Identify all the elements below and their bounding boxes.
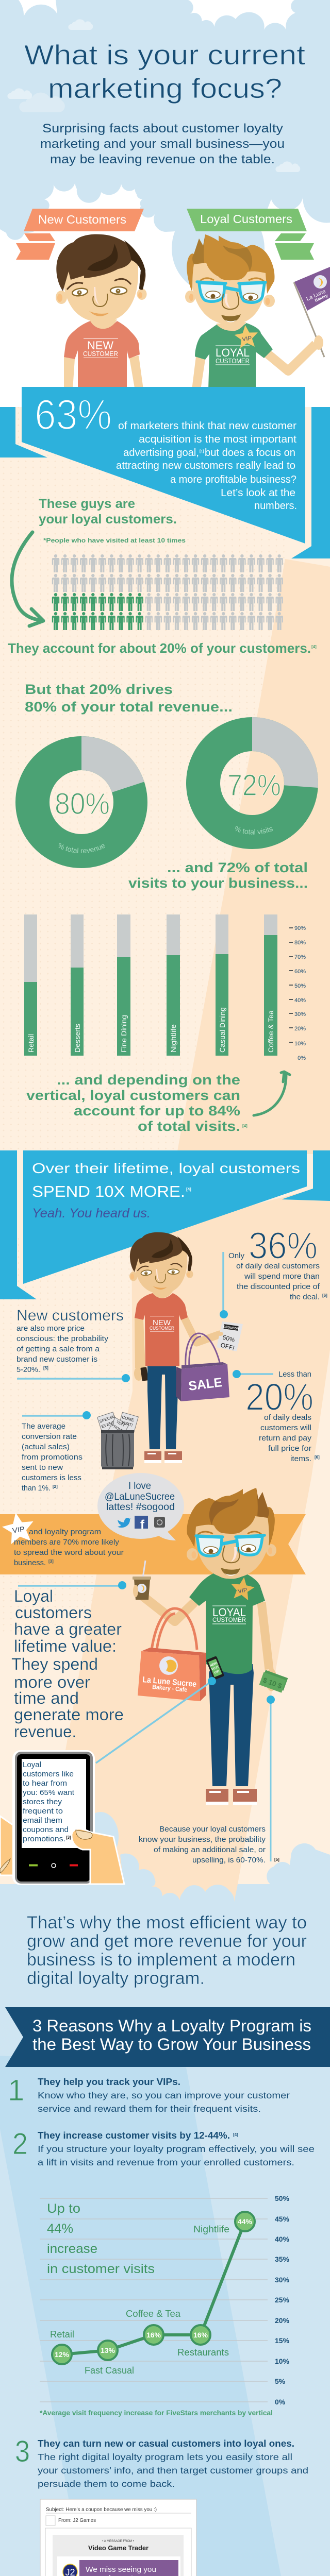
bar chart: loyal visits by vertical: 90% (294, 925, 306, 931)
panel: 63% of marketers: [1] (200, 450, 204, 453)
panel: 63% of marketers: but does a focus on (205, 447, 295, 459)
stat: 20%: of daily deals (264, 1413, 311, 1422)
character: new customer with sale bag: CUSTOMER (150, 1326, 174, 1331)
line chart: visit increase by vertical: 44% (238, 2217, 253, 2226)
panel: spend 10x more: SPEND 10X MORE. (32, 1182, 185, 1200)
character: new customer with sale bag: NEW (153, 1318, 171, 1327)
statement: up to 84% of visits (26, 1072, 248, 1134)
text: new customers price conscious: conscious: the probability (16, 1334, 109, 1343)
subtitle (40, 122, 285, 166)
statement: most efficient way to grow: business is to implement a modern (27, 1950, 295, 1970)
donut chart: 72% total visits: 72% (227, 769, 281, 802)
line chart: visit increase by vertical: 50% (275, 2194, 290, 2202)
character: loyal customer with flag: Bakery (314, 293, 329, 303)
icon: trash can with promotions (97, 1412, 138, 1469)
speech bubble: social post: I love (128, 1481, 151, 1492)
bar chart: loyal visits by vertical: 60% (294, 969, 306, 975)
email example: Video Game Trader (88, 2544, 148, 2552)
banner: 3 reasons (5, 2007, 330, 2067)
bar chart: loyal visits by vertical: 10% (294, 1041, 306, 1047)
ribbon: new customers: New Customers (38, 213, 126, 226)
phone in hand with stat: Loyal (23, 1761, 41, 1769)
text: new customers price conscious: are also more price (16, 1324, 85, 1333)
arrow: curved green up (254, 1072, 290, 1115)
reason 1: service and reward them for their frequent visits. (38, 2104, 261, 2114)
character: loyal customer with cup and bag (133, 1488, 276, 1805)
phone in hand with stat: email them (23, 1817, 62, 1825)
character: new customer with sale bag (129, 1232, 229, 1463)
text: loyal customers greater lifetime value: Loyal (14, 1587, 53, 1605)
note: people who visited: *People who have visited at least 10 times (43, 537, 186, 544)
speech bubble: social post: @LaLuneSucree (105, 1492, 175, 1502)
heading: 80% of revenue: 80% of your total revenue... (25, 699, 233, 715)
reason 3: persuade them to come back. (38, 2479, 175, 2489)
title (24, 40, 305, 104)
chart footnote: *Average visit frequency increase for FiveStars merchants by vertical (40, 2409, 273, 2417)
email example (40, 2499, 196, 2576)
panel: 63% of marketers: Let’s look at the (221, 487, 295, 499)
text: upselling probability: of making an additional sale, or (154, 1845, 266, 1854)
blue ribbon band behind stat 63% (0, 407, 330, 558)
icon: facebook (135, 1516, 148, 1532)
connector: conversion rate (22, 1411, 91, 1419)
text: upselling probability (139, 1825, 279, 1865)
stat: 36% (228, 1225, 327, 1301)
text: upselling probability: know your business, the probability (139, 1835, 266, 1844)
reason 1: They help you track your VIPs. (38, 2077, 180, 2087)
text: conversion rate: from promotions (22, 1453, 82, 1462)
bottom cloud background (0, 1812, 330, 2576)
donut chart: 72% total visits: % total visits (235, 826, 273, 835)
text: conversion rate: The average (22, 1422, 65, 1431)
statement: 20% of customers: [4] (311, 645, 317, 649)
bar chart: loyal visits by vertical: Nightlife (169, 1024, 177, 1053)
stat: 36%: will spend more than (244, 1272, 320, 1281)
stat: 36%: of daily deal customers (236, 1262, 320, 1270)
reason 1: 1 (8, 2074, 24, 2107)
stat: 20%: 20% (245, 1376, 314, 1418)
bar chart: loyal visits by vertical: 40% (294, 997, 306, 1004)
reason 3: your customers’ info, and then target customer groups and (38, 2465, 308, 2476)
panel: spend 10x more: Over their lifetime, loyal customers (32, 1160, 300, 1176)
text: loyal customers greater lifetime value: more over (14, 1673, 90, 1691)
subtitle: marketing and your small business—you (40, 137, 285, 151)
bar chart: loyal visits by vertical: Casual Dining (218, 1007, 226, 1053)
stat: 20%: return and pay (259, 1434, 312, 1443)
heading: these guys are your loyal customers: your loyal customers. (39, 512, 177, 527)
text: loyal customers greater lifetime value: lifetime value: (14, 1637, 117, 1655)
darker blue background stripe (0, 2056, 299, 2576)
stat: 36%: the discounted price of (237, 1282, 320, 1291)
line chart: visit increase by vertical: Restaurants (177, 2347, 229, 2358)
bar chart: loyal visits by vertical: 50% (294, 983, 306, 989)
line chart: visit increase by vertical: 5% (275, 2377, 286, 2385)
ribbon: new customers (16, 209, 144, 260)
stat: 36%: the deal. (290, 1293, 320, 1301)
line chart: visit increase by vertical: 10% (275, 2357, 290, 2365)
badge and text: vip members: VIP (12, 1524, 25, 1535)
text: conversion rate: (actual sales) (22, 1443, 70, 1451)
stat: 36%: 36% (249, 1225, 318, 1267)
stat: 20%: [6] (315, 1455, 320, 1460)
banner: 3 reasons: 3 Reasons Why a Loyalty Program is (32, 2016, 311, 2035)
reason 1: Know who they are, so you can improve your customer (38, 2090, 290, 2100)
stat: 20%: customers will (260, 1423, 311, 1432)
text: upselling probability: upselling, is 60-70%. (192, 1856, 266, 1865)
connector: phone to pocket (96, 1677, 216, 1763)
icon: phone in pocket: VISIT (211, 1666, 220, 1671)
panel: 63% of marketers: of marketers think that new customer (118, 420, 296, 432)
character: loyal customer with flag: La Lune (305, 289, 327, 302)
text: loyal customers greater lifetime value (11, 1587, 124, 1741)
icon: facebook: f (140, 1518, 145, 1532)
text: upselling probability: [5] (274, 1857, 279, 1862)
reason 2 (12, 2127, 315, 2167)
bar chart: loyal visits by vertical: 80% (294, 940, 306, 946)
icon: trash can with promotions: COME (121, 1415, 135, 1423)
text: conversion rate: than 1%. (22, 1484, 51, 1493)
pictogram: 100 customers (52, 554, 283, 630)
statement: up to 84% of visits: of total visits. (138, 1118, 240, 1134)
text: new customers price conscious: of getting a sale from a (16, 1345, 100, 1353)
bar chart: loyal visits by vertical: Retail (27, 1034, 35, 1053)
reason 3: They can turn new or casual customers into loyal ones. (38, 2438, 294, 2449)
text: conversion rate: conversion rate (22, 1432, 77, 1441)
icon: trash can with promotions: PROMO (111, 1424, 125, 1434)
reason 2: If you structure your loyalty program effectively, you will see (38, 2144, 315, 2154)
phone in hand with stat: customers like (23, 1770, 74, 1778)
text: conversion rate (22, 1422, 82, 1493)
statement: most efficient way to grow: digital loyalty program. (27, 1969, 205, 1988)
icon: coupon 50% off: OFF! (220, 1341, 235, 1352)
reason 1 (8, 2074, 290, 2114)
reason 3 (15, 2435, 308, 2489)
character: loyal customer with cup and bag: LOYAL (212, 1606, 246, 1619)
bag: la lune sucree: La Lune Sucree (142, 1675, 197, 1689)
logo: j2 games (63, 2564, 77, 2576)
speech bubble: social post: lattes! #sogood (106, 1502, 175, 1513)
text: new customers price conscious: New customers (16, 1307, 124, 1324)
line chart: visit increase by vertical: 15% (275, 2336, 290, 2345)
phone in hand with stat (0, 1750, 124, 1885)
statement: up to 84% of visits: ... and depending on the (57, 1072, 240, 1088)
connector: loyal customers (18, 1581, 126, 1589)
line chart: visit increase by vertical: Retail (50, 2329, 74, 2340)
panel: 63% of marketers: 63% (35, 391, 112, 438)
badge and text: vip members: and loyalty program (29, 1528, 101, 1536)
line chart: visit increase by vertical: 16% (193, 2331, 208, 2339)
line chart: visit increase by vertical: 16% (146, 2331, 161, 2339)
text: loyal customers greater lifetime value: They spend (11, 1655, 98, 1673)
text: new customers price conscious: brand new customer is (16, 1355, 97, 1364)
panel: spend 10x more (23, 1150, 307, 1284)
purple message panel (79, 2560, 178, 2576)
statement: 72% of visits: visits to your business... (128, 875, 308, 891)
donut chart: 80% total revenue: 80% (55, 787, 110, 821)
email example: From: J2 Games (58, 2518, 96, 2523)
line chart: visit increase by vertical: 35% (275, 2255, 290, 2263)
panel: spend 10x more: Yeah. You heard us. (32, 1206, 151, 1221)
character: loyal customer with cup and bag: CUSTOMER (212, 1616, 246, 1623)
panel: 63% of marketers: a more profitable business? (170, 474, 296, 485)
reason 2: a lift in visits and revenue from your enrolled customers. (38, 2157, 294, 2167)
stat: 20%: Less than (278, 1370, 311, 1379)
character: new customer with sale bag: SALE (188, 1375, 223, 1394)
icon: phone in pocket: NEW! (209, 1662, 218, 1668)
panel: spend 10x more: [4] (186, 1187, 191, 1192)
statement: most efficient way to grow: That’s why the most efficient way to (27, 1913, 307, 1933)
line chart: visit increase by vertical: Nightlife (193, 2224, 229, 2234)
icon: money (258, 1665, 290, 1697)
bag: la lune sucree (138, 1608, 206, 1701)
line chart: visit increase by vertical: Up to (47, 2201, 80, 2216)
line chart: visit increase by vertical: Coffee & Tea (126, 2309, 181, 2319)
character: new customer (56, 234, 146, 397)
donut chart: 80% total revenue: % total revenue (59, 843, 105, 853)
badge and text: vip members: business. (14, 1558, 46, 1567)
statement: most efficient way to grow: grow and get more revenue for your (27, 1931, 307, 1951)
phone in hand with stat: promotions. (23, 1835, 65, 1843)
text: loyal customers greater lifetime value: time and (14, 1689, 79, 1707)
subtitle: Surprising facts about customer loyalty (42, 122, 283, 135)
statement: 72% of visits: ... and 72% of total (167, 860, 308, 875)
panel: 63% of marketers (22, 387, 305, 544)
icon: twitter bird (118, 1518, 130, 1528)
text: upselling probability: Because your loyal customers (159, 1825, 266, 1834)
stat: 20%: items. (290, 1454, 311, 1463)
icon: instagram (154, 1517, 165, 1528)
icon: coupon 50% off (217, 1321, 243, 1352)
ribbon: vip word of mouth (0, 1514, 306, 1574)
heading: 80% of revenue: But that 20% drives (25, 682, 173, 697)
badge and text: vip members: to spread the word about your (14, 1548, 124, 1557)
heading: these guys are your loyal customers (39, 497, 177, 527)
statement: up to 84% of visits: vertical, loyal customers can (26, 1088, 240, 1103)
reason 2: 2 (12, 2127, 28, 2161)
panel: 63% of marketers: acquisition is the most important (139, 434, 296, 445)
character: new customer: CUSTOMER (83, 350, 118, 358)
line chart: visit increase by vertical: 30% (275, 2276, 290, 2284)
text: loyal customers greater lifetime value: have a greater (14, 1620, 122, 1638)
bar chart: loyal visits by vertical: Desserts (73, 1024, 81, 1053)
title: What is your current (24, 40, 305, 71)
donut chart: 80% total revenue (15, 736, 147, 868)
speech bubble: social post (97, 1473, 184, 1540)
text: new customers price conscious (16, 1307, 124, 1374)
bar chart: loyal visits by vertical: 0% (298, 1055, 306, 1061)
small decorative clouds (7, 19, 300, 172)
character: loyal customer with flag (185, 234, 330, 390)
subtitle: may be leaving revenue on the table. (50, 152, 275, 166)
text: loyal customers greater lifetime value: revenue. (14, 1722, 76, 1741)
icon: phone in pocket: US! (214, 1670, 220, 1675)
line chart: visit increase by vertical: in customer visits (47, 2262, 155, 2276)
reason 3: 3 (15, 2435, 30, 2468)
icon: trash can with promotions: VISIT! (121, 1420, 133, 1428)
statement: 20% of customers: They account for about 20% of your customers. (8, 640, 311, 656)
statement: 72% of visits (128, 860, 308, 891)
bar chart: loyal visits by vertical: Fine Dining (120, 1015, 128, 1053)
icon: money: $ 10 $ (262, 1676, 283, 1690)
line chart: visit increase by vertical: 20% (275, 2316, 290, 2325)
text: conversion rate: customers is less (22, 1473, 81, 1482)
badge and text: vip members: members are 70% more likely (14, 1538, 120, 1547)
bar chart: loyal visits by vertical: 70% (294, 954, 306, 960)
connector: new customers (17, 1374, 130, 1382)
blue ribbon band behind spend 10x (0, 1150, 330, 1299)
text: new customers price conscious: [5] (43, 1366, 48, 1370)
dotted pattern areas (0, 407, 289, 1633)
statement: most efficient way to grow (27, 1913, 307, 1988)
connector: 36% (220, 1252, 228, 1318)
icon: trash can with promotions: SPECIAL (99, 1414, 117, 1424)
ribbon: loyal customers (187, 209, 314, 260)
bar chart: loyal visits by vertical: Coffee & Tea (267, 1010, 275, 1053)
statement: up to 84% of visits: [4] (242, 1124, 248, 1128)
panel: 63% of marketers: advertising goal, (123, 447, 199, 459)
icon: trash can with promotions: EVENT (101, 1420, 116, 1429)
statement: up to 84% of visits: account for up to 84% (74, 1103, 240, 1118)
line chart: visit increase by vertical: 0% (275, 2398, 286, 2406)
icon: coffee cup (133, 1561, 193, 1621)
heading: 80% of revenue (25, 682, 233, 715)
text: conversion rate: sent to new (22, 1463, 63, 1472)
connector: upselling (267, 1696, 275, 1861)
email example: Subject: Here's a coupon because we miss you :) (46, 2507, 157, 2513)
bar chart: loyal visits by vertical: 20% (294, 1026, 306, 1032)
connector: 20% (233, 1370, 273, 1378)
arrow: curved green down (12, 532, 43, 626)
line chart: visit increase by vertical: 13% (101, 2346, 116, 2354)
reason 2: [4] (233, 2132, 238, 2137)
bar chart: loyal visits by vertical: 30% (294, 1011, 306, 1018)
phone in hand with stat: [3] (66, 1835, 71, 1840)
line chart: visit increase by vertical: 40% (275, 2235, 290, 2243)
panel: 63% of marketers: attracting new customers really lead to (116, 460, 295, 471)
reason 3: The right digital loyalty program lets you easily store all (38, 2452, 292, 2462)
phone in hand with stat: coupons and (23, 1826, 69, 1834)
ribbon: loyal customers: Loyal Customers (200, 212, 292, 226)
panel: 63% of marketers: numbers. (254, 500, 297, 512)
line chart: visit increase by vertical: 45% (275, 2215, 290, 2223)
email example: • A MESSAGE FROM • (102, 2540, 134, 2543)
reason 2: They increase customer visits by 12-44%. (38, 2130, 230, 2141)
character: new customer: NEW (87, 339, 113, 352)
icon: coupon 50% off: 50% (222, 1333, 236, 1344)
line chart: visit increase by vertical: Fast Casual (85, 2365, 134, 2376)
icon: phone in pocket (206, 1656, 224, 1680)
heading: these guys are your loyal customers: These guys are (39, 497, 135, 511)
stat: 36%: Only (228, 1251, 245, 1260)
title: marketing focus? (48, 73, 282, 104)
text: new customers price conscious: 5-20%. (16, 1365, 40, 1374)
line chart: visit increase by vertical (40, 2194, 290, 2406)
text: loyal customers greater lifetime value: generate more (14, 1705, 124, 1724)
stat: 20% (245, 1370, 320, 1463)
badge and text: vip members: [3] (48, 1559, 54, 1564)
icon: trash can with promotions: TEXT (116, 1420, 126, 1428)
character: loyal customer with cup and bag: VIP (238, 1587, 248, 1595)
phone in hand with stat: frequent to (23, 1807, 63, 1816)
icon: coupon 50% off: GROUPON (223, 1326, 239, 1331)
stat: 36%: [6] (322, 1293, 327, 1298)
character: loyal customer with flag: LOYAL (216, 346, 250, 359)
character: loyal customer with flag: CUSTOMER (216, 357, 250, 365)
badge and text: vip members (0, 1510, 124, 1567)
cream section background (0, 407, 330, 1901)
banner: 3 reasons: the Best Way to Grow Your Business (32, 2035, 311, 2054)
peach background shape lower (21, 1185, 330, 1906)
donut chart: 72% total visits (186, 717, 318, 849)
bar chart: loyal visits by vertical (24, 914, 306, 1061)
purple message panel: We miss seeing you (86, 2565, 156, 2574)
phone in hand with stat: you: 65% want (23, 1789, 74, 1797)
line chart: visit increase by vertical: 25% (275, 2296, 290, 2304)
line chart: visit increase by vertical: 44% (47, 2222, 73, 2236)
bag: la lune sucree: Bakery - Cafe (152, 1683, 188, 1693)
character: loyal customer with flag: VIP (242, 335, 252, 343)
peach background shape upper (177, 559, 330, 1154)
line chart: visit increase by vertical: 12% (55, 2350, 70, 2359)
phone in hand with stat: to hear from (23, 1780, 67, 1788)
line chart: visit increase by vertical: increase (47, 2242, 97, 2256)
stat: 20%: full price for (268, 1444, 311, 1453)
header cloud background (0, 0, 330, 295)
text: conversion rate: [2] (53, 1484, 58, 1489)
phone in hand with stat: stores they (23, 1798, 62, 1806)
text: loyal customers greater lifetime value: customers (15, 1603, 92, 1622)
